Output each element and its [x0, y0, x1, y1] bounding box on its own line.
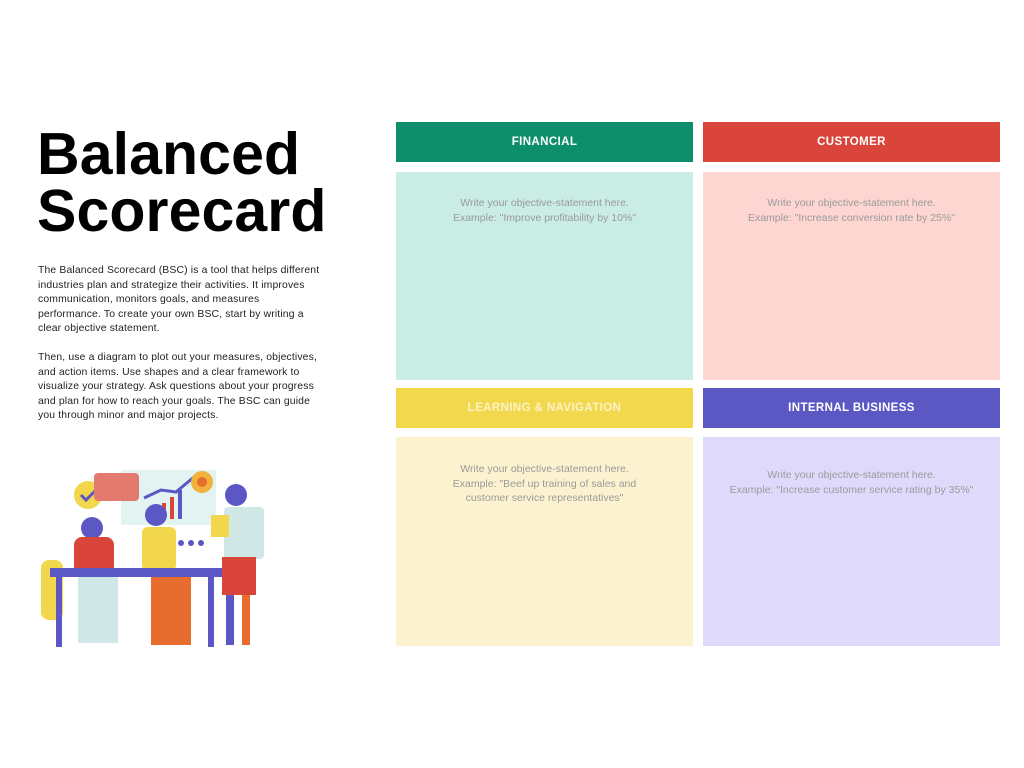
panel: customer [703, 172, 1000, 380]
panel: internal business [703, 437, 1000, 646]
text block: description: communication, monitors goals, and measures [38, 294, 259, 305]
text block: description: Then, use a diagram to plot out your measures, objectives, [38, 352, 317, 363]
panel: customer: Example: "Increase conversion rate by 25%" [748, 212, 955, 224]
panel: internal business: Write your objective-statement here. [767, 469, 936, 481]
text block: description [38, 265, 320, 421]
header: learning & navigation: LEARNING & NAVIGATION [468, 402, 621, 414]
text block: description: clear objective statement. [38, 323, 160, 334]
panel: learning & navigation: Write your objective-statement here. [460, 463, 629, 475]
panel: financial: Write your objective-statement here. [460, 197, 629, 209]
header: customer [703, 122, 1000, 162]
panel: learning & navigation [396, 437, 693, 646]
panel: financial: Example: "Improve profitability by 10%" [453, 212, 636, 224]
title: Scorecard [37, 178, 327, 244]
header: learning & navigation [396, 388, 693, 428]
header: customer: CUSTOMER [817, 136, 886, 148]
text block: description: and action items. Use shapes and a clear framework to [38, 366, 300, 378]
header: financial [396, 122, 693, 162]
text block: description: you through minor and major projects. [38, 410, 219, 421]
panel: internal business: Example: "Increase customer service rating by 35%" [730, 484, 973, 496]
header: internal business [703, 388, 1000, 428]
text block: description: The Balanced Scorecard (BSC) is a tool that helps different [38, 265, 319, 276]
title [37, 121, 327, 244]
text block: description: industries plan and strategize their activities. It improves [38, 280, 305, 290]
panel: learning & navigation: customer service representatives" [466, 492, 623, 504]
header: internal business: INTERNAL BUSINESS [788, 402, 915, 414]
text block: description: and plan for how to reach your goals. The BSC can guide [38, 396, 310, 406]
text block: description: visualize your strategy. Ask questions about your progress [38, 381, 314, 392]
title: Balanced [37, 121, 300, 187]
panel: financial [396, 172, 693, 380]
header: financial: FINANCIAL [512, 136, 577, 148]
text block: description: performance. To create your own BSC, start by writing a [38, 308, 304, 320]
illustration: team meeting [41, 470, 264, 647]
panel: learning & navigation: Example: "Beef up training of sales and [453, 478, 636, 490]
panel: customer: Write your objective-statement here. [767, 197, 936, 209]
